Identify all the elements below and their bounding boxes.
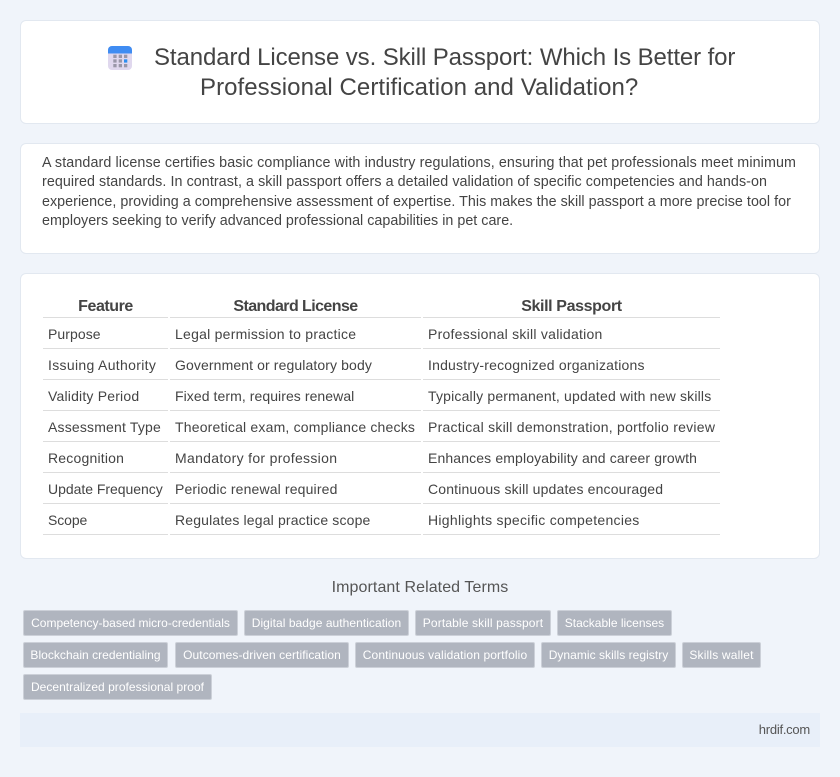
table row: Scope: Scope bbox=[48, 512, 87, 528]
heading: related terms: Important Related Terms bbox=[332, 579, 508, 596]
tag bbox=[541, 642, 676, 668]
tag: Digital badge authentication bbox=[252, 616, 401, 630]
tag: Dynamic skills registry bbox=[549, 648, 668, 662]
table row: Recognition: Recognition bbox=[48, 450, 124, 466]
title bbox=[154, 44, 735, 101]
table row: Issuing Authority: Industry-recognized organizations bbox=[428, 357, 645, 373]
table row: Issuing Authority bbox=[48, 357, 645, 373]
table row: Purpose: Professional skill validation bbox=[428, 326, 603, 342]
table header: Feature: Feature bbox=[78, 298, 133, 315]
tag: Competency-based micro-credentials bbox=[31, 616, 230, 630]
table row: Update Frequency: Continuous skill updates encouraged bbox=[428, 481, 663, 497]
table row: Recognition: Mandatory for profession bbox=[175, 450, 337, 466]
table row: Purpose: Legal permission to practice bbox=[175, 326, 356, 342]
tag bbox=[557, 610, 672, 636]
panel: header bbox=[20, 20, 820, 124]
title: Standard License vs. Skill Passport: Which Is Better for bbox=[154, 44, 735, 71]
icon: calendar bbox=[108, 46, 132, 70]
table row: Assessment Type: Assessment Type bbox=[48, 419, 161, 435]
text block: description: experience, providing a comprehensive assessment of expertise. This makes the skill passport a more precise tool for bbox=[42, 194, 791, 210]
panel: comparison table bbox=[20, 273, 820, 559]
text block: description bbox=[42, 155, 796, 229]
tag bbox=[682, 642, 761, 668]
text block: description: A standard license certifies basic compliance with industry regulations, ensuring that pet professionals meet minimum bbox=[42, 155, 796, 171]
text block: description: employers seeking to verify advanced professional capabilities in pet care. bbox=[42, 213, 513, 229]
table row: Recognition bbox=[48, 450, 697, 466]
tag bbox=[23, 642, 168, 668]
tag bbox=[244, 610, 409, 636]
table row: Scope: Regulates legal practice scope bbox=[175, 512, 370, 528]
tag: Decentralized professional proof bbox=[31, 680, 204, 694]
tag: Stackable licenses bbox=[565, 616, 664, 630]
table row: Issuing Authority: Government or regulatory body bbox=[175, 357, 372, 373]
table row: Assessment Type: Theoretical exam, compliance checks bbox=[175, 419, 415, 435]
table row: Assessment Type bbox=[48, 419, 715, 435]
tag bbox=[355, 642, 535, 668]
tag list: related terms bbox=[23, 610, 761, 700]
text block: description: required standards. In contrast, a skill passport offers a detailed validation of specific competencies and hands-on bbox=[42, 174, 767, 190]
tag: Skills wallet bbox=[689, 648, 754, 662]
tag bbox=[175, 642, 349, 668]
table row: Validity Period: Typically permanent, updated with new skills bbox=[428, 388, 711, 404]
table row: Recognition: Enhances employability and career growth bbox=[428, 450, 697, 466]
table row: Validity Period: Fixed term, requires renewal bbox=[175, 388, 354, 404]
table header: Standard License: Standard License bbox=[233, 298, 358, 315]
tag: Blockchain credentialing bbox=[30, 648, 161, 662]
table row: Issuing Authority: Issuing Authority bbox=[48, 357, 156, 373]
table row: Assessment Type: Practical skill demonstration, portfolio review bbox=[428, 419, 715, 435]
table row: Scope: Highlights specific competencies bbox=[428, 512, 640, 528]
table row: Scope bbox=[48, 512, 640, 528]
table row: Purpose bbox=[48, 326, 603, 342]
footer bar bbox=[20, 713, 820, 747]
footer credit: hrdif.com bbox=[759, 722, 810, 737]
tag bbox=[415, 610, 551, 636]
table row: Validity Period bbox=[48, 388, 711, 404]
table row: Update Frequency bbox=[48, 481, 663, 497]
table row: Update Frequency: Periodic renewal required bbox=[175, 481, 338, 497]
tag bbox=[23, 610, 238, 636]
table row: Update Frequency: Update Frequency bbox=[48, 481, 163, 497]
tag: Continuous validation portfolio bbox=[363, 648, 527, 662]
tag: Outcomes-driven certification bbox=[183, 648, 341, 662]
tag bbox=[23, 674, 212, 700]
table row: Purpose: Purpose bbox=[48, 326, 101, 342]
panel: description bbox=[20, 143, 820, 254]
table row: Validity Period: Validity Period bbox=[48, 388, 139, 404]
tag: Portable skill passport bbox=[423, 616, 543, 630]
title: Professional Certification and Validation? bbox=[200, 74, 638, 101]
table header: Skill Passport: Skill Passport bbox=[521, 298, 622, 315]
